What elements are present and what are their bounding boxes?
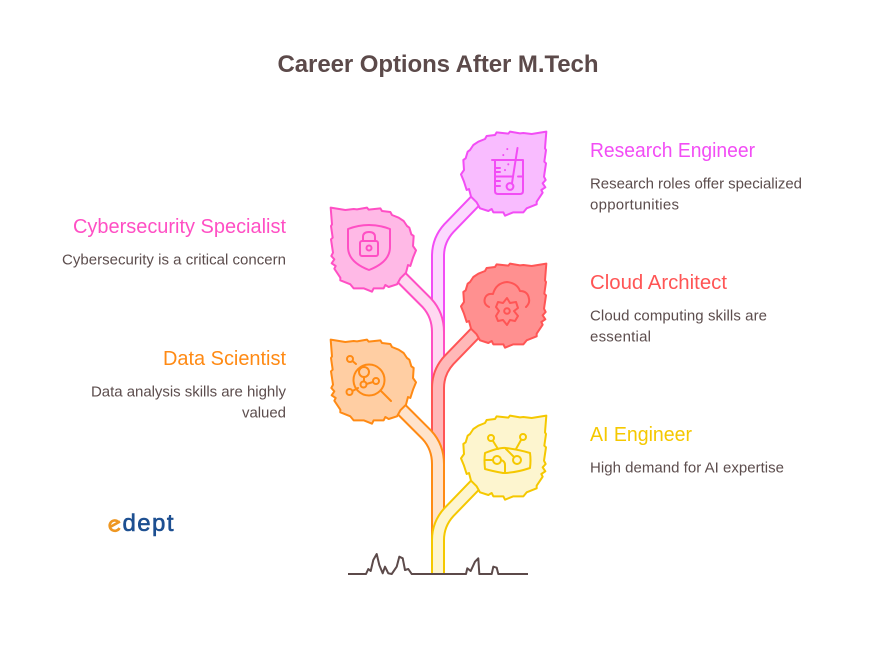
stem: cloud architect (438, 328, 480, 530)
logo: edept: dept (122, 510, 174, 537)
label: AI engineer (590, 424, 784, 476)
stem: cybersecurity specialist (395, 271, 438, 400)
label: research engineer: opportunities (590, 196, 679, 214)
label: research engineer (590, 140, 802, 214)
label: cloud architect: Cloud Architect (590, 272, 727, 294)
label: data scientist: Data Scientist (163, 348, 286, 370)
icon: beaker (492, 148, 523, 194)
title: Career Options After M.Tech (278, 51, 598, 78)
label: data scientist: valued (242, 404, 286, 422)
label: cybersecurity specialist: Cybersecurity Specialist (73, 216, 286, 238)
leaf: data scientist (331, 340, 416, 424)
label: AI engineer: High demand for AI expertise (590, 460, 784, 476)
stem: research engineer (438, 196, 480, 400)
label: cloud architect: essential (590, 328, 651, 346)
label: data scientist: Data analysis skills are highly (91, 384, 286, 400)
leaf: research engineer (461, 132, 546, 216)
label: research engineer: Research roles offer specialized (590, 176, 802, 192)
label: cloud architect: Cloud computing skills are (590, 308, 767, 324)
label: cloud architect (590, 272, 767, 346)
icon: shield with padlock (348, 225, 390, 270)
icon: magnifier with network nodes (346, 356, 391, 401)
icon: cloud with gear (484, 282, 529, 325)
label: research engineer: Research Engineer (590, 140, 755, 162)
stem: AI engineer (438, 480, 480, 574)
stem: data scientist (395, 403, 438, 560)
leaf: AI engineer (461, 416, 546, 500)
icon: AI chip (484, 434, 530, 473)
label: cybersecurity specialist (62, 216, 286, 268)
plant stems (395, 196, 480, 574)
ground with grass (348, 554, 528, 574)
label: cybersecurity specialist: Cybersecurity is a critical concern (62, 252, 286, 268)
leaf: cloud architect (461, 264, 546, 348)
label: AI engineer: AI Engineer (590, 424, 692, 446)
leaf: cybersecurity specialist (331, 208, 416, 292)
label: data scientist (91, 348, 286, 422)
